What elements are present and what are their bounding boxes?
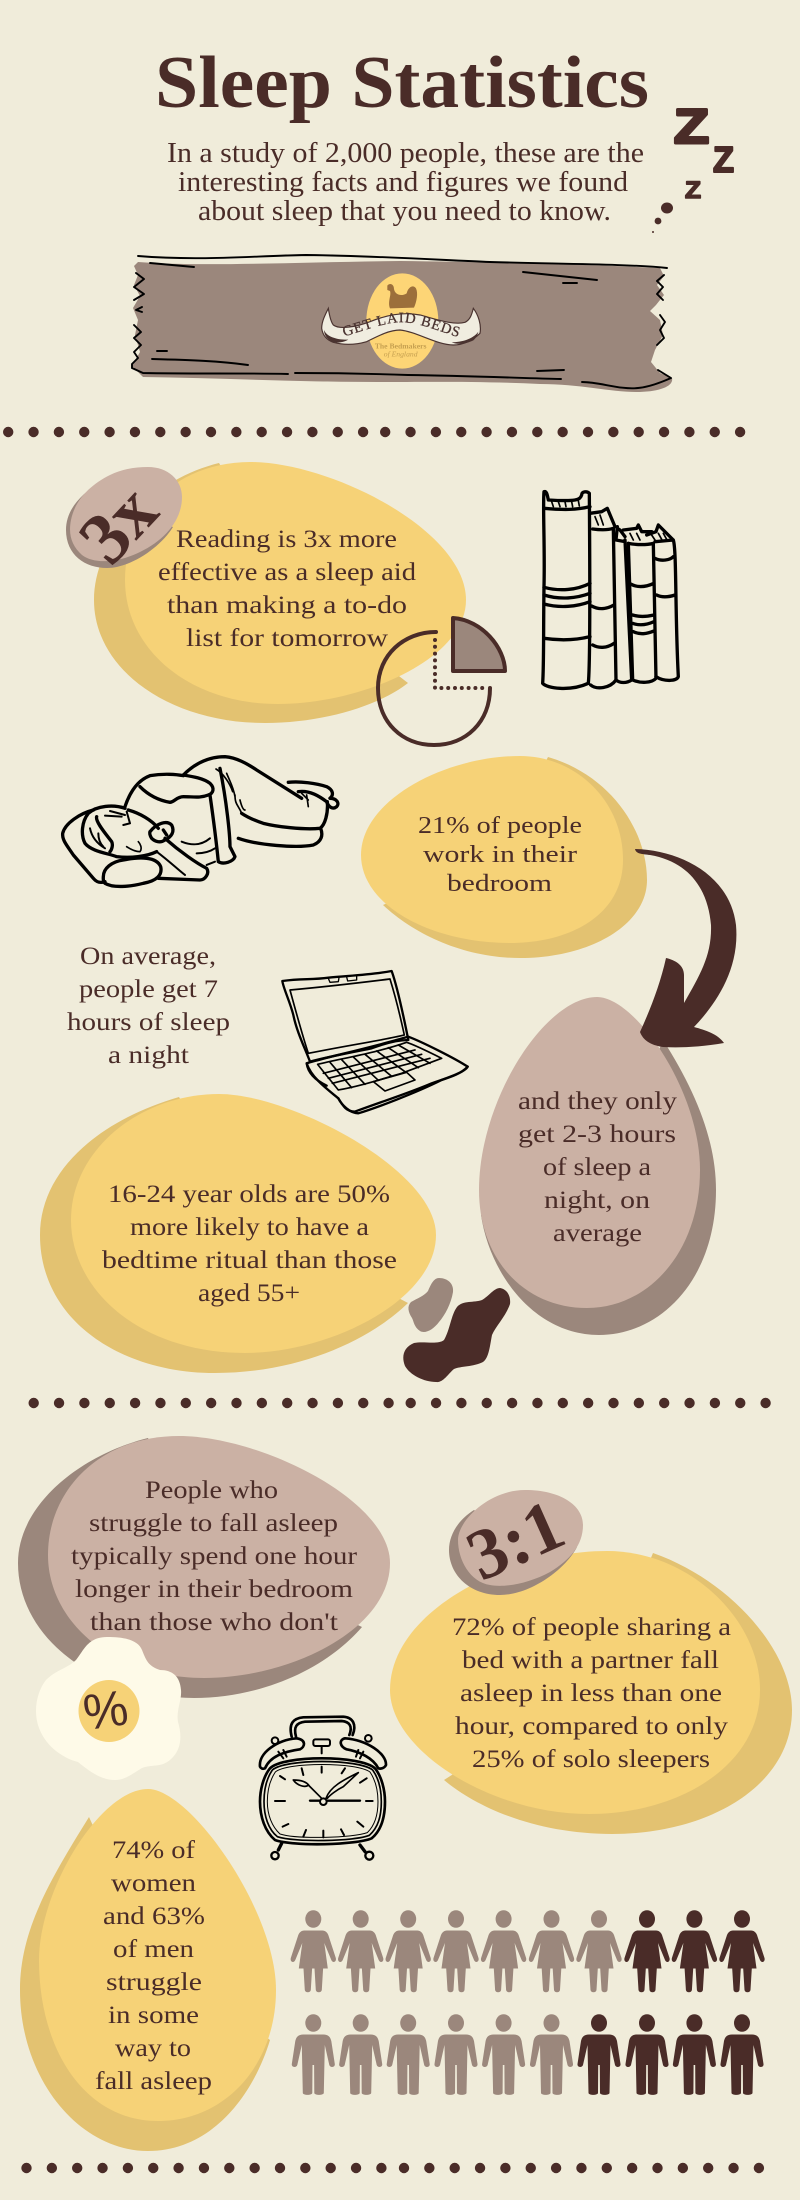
pictogram: women 74 percent xyxy=(291,1910,765,1992)
women and men text: and 63% xyxy=(103,1901,205,1930)
2-3 hours text: of sleep a xyxy=(543,1152,651,1181)
icon: fried egg percent xyxy=(36,1637,181,1780)
struggle text: than those who don't xyxy=(90,1607,338,1636)
women and men text: in some xyxy=(108,2000,199,2029)
icon: fried egg percent: % xyxy=(80,1679,132,1741)
2-3 hours text: and they only xyxy=(518,1086,677,1115)
struggle text: struggle to fall asleep xyxy=(89,1508,338,1537)
logo: get laid beds: of England xyxy=(384,350,418,359)
21 percent text: bedroom xyxy=(447,870,552,897)
logo: get laid beds: The Bedmakers xyxy=(375,342,427,351)
2-3 hours text: average xyxy=(553,1218,642,1247)
title: Sleep Statistics xyxy=(155,42,649,124)
decorative blobs xyxy=(403,1278,510,1382)
reading text: list for tomorrow xyxy=(186,623,389,652)
struggle text: longer in their bedroom xyxy=(75,1574,353,1603)
women and men text xyxy=(95,1835,212,2095)
icon: alarm clock xyxy=(260,1717,386,1860)
2-3 hours text: night, on xyxy=(544,1185,650,1214)
partner text: 72% of people sharing a xyxy=(452,1612,731,1641)
bedtime ritual text: aged 55+ xyxy=(198,1278,300,1307)
reading text: Reading is 3x more xyxy=(176,524,397,553)
21 percent text xyxy=(418,812,582,897)
icon: books xyxy=(543,492,678,688)
struggle text xyxy=(71,1475,358,1636)
partner text: asleep in less than one xyxy=(460,1678,722,1707)
panel: women and men struggle blob xyxy=(20,1789,276,2151)
2-3 hours text xyxy=(518,1086,677,1247)
women and men text: fall asleep xyxy=(95,2066,212,2095)
partner text: 25% of solo sleepers xyxy=(472,1744,710,1773)
pictogram: men 63 percent xyxy=(292,2014,764,2095)
women and men text: women xyxy=(111,1868,196,1897)
bedtime ritual text: more likely to have a xyxy=(130,1212,369,1241)
logo: get laid beds xyxy=(321,273,481,369)
text: average sleep: hours of sleep xyxy=(67,1007,230,1036)
intro text: interesting facts and figures we found xyxy=(178,167,628,198)
dotted divider xyxy=(34,1398,766,1408)
panel: bedtime ritual blob xyxy=(40,1094,436,1373)
intro text: about sleep that you need to know. xyxy=(198,196,611,227)
panel: 2-3 hours blob xyxy=(479,997,716,1335)
reading text: effective as a sleep aid xyxy=(158,557,416,586)
bedtime ritual text: 16-24 year olds are 50% xyxy=(108,1179,390,1208)
icon: sleeping person xyxy=(63,757,338,886)
intro text: In a study of 2,000 people, these are the xyxy=(167,138,644,169)
dotted divider xyxy=(26,2163,760,2173)
panel: struggle to fall asleep blob xyxy=(18,1436,390,1698)
2-3 hours text: get 2-3 hours xyxy=(518,1119,676,1148)
women and men text: struggle xyxy=(106,1967,202,1996)
reading text: than making a to-do xyxy=(167,590,407,619)
panel: partner sleep blob xyxy=(390,1484,792,1834)
dotted divider xyxy=(8,427,741,437)
badge: 3x: 3x xyxy=(63,470,174,580)
icon: snoring zzz: Z xyxy=(685,177,701,204)
text: average sleep: a night xyxy=(108,1040,189,1069)
panel: reading blob xyxy=(63,462,466,723)
icon: snoring zzz xyxy=(652,101,734,233)
women and men text: way to xyxy=(115,2033,191,2062)
text: average sleep xyxy=(67,941,230,1069)
struggle text: typically spend one hour xyxy=(71,1541,358,1570)
partner text: bed with a partner fall xyxy=(462,1645,719,1674)
wooden plank with logo xyxy=(131,254,672,392)
struggle text: People who xyxy=(145,1475,278,1504)
women and men text: of men xyxy=(113,1934,194,1963)
21 percent text: 21% of people xyxy=(418,812,582,839)
partner text xyxy=(452,1612,731,1773)
icon: pie chart xyxy=(378,618,505,745)
reading text xyxy=(158,524,416,652)
intro text xyxy=(167,138,644,227)
21 percent text: work in their xyxy=(423,841,577,868)
icon: snoring zzz: Z xyxy=(674,101,709,154)
arrow xyxy=(635,849,736,1047)
panel: 21 percent blob xyxy=(361,756,647,958)
text: average sleep: On average, xyxy=(80,941,216,970)
icon: laptop xyxy=(282,971,468,1113)
badge: 3:1: 3:1 xyxy=(455,1484,575,1596)
bedtime ritual text: bedtime ritual than those xyxy=(102,1245,397,1274)
icon: snoring zzz: Z xyxy=(713,139,734,180)
bedtime ritual text xyxy=(102,1179,397,1307)
women and men text: 74% of xyxy=(112,1835,196,1864)
text: average sleep: people get 7 xyxy=(79,974,218,1003)
logo: get laid beds: GET LAID BEDS xyxy=(342,312,460,336)
partner text: hour, compared to only xyxy=(455,1711,728,1740)
